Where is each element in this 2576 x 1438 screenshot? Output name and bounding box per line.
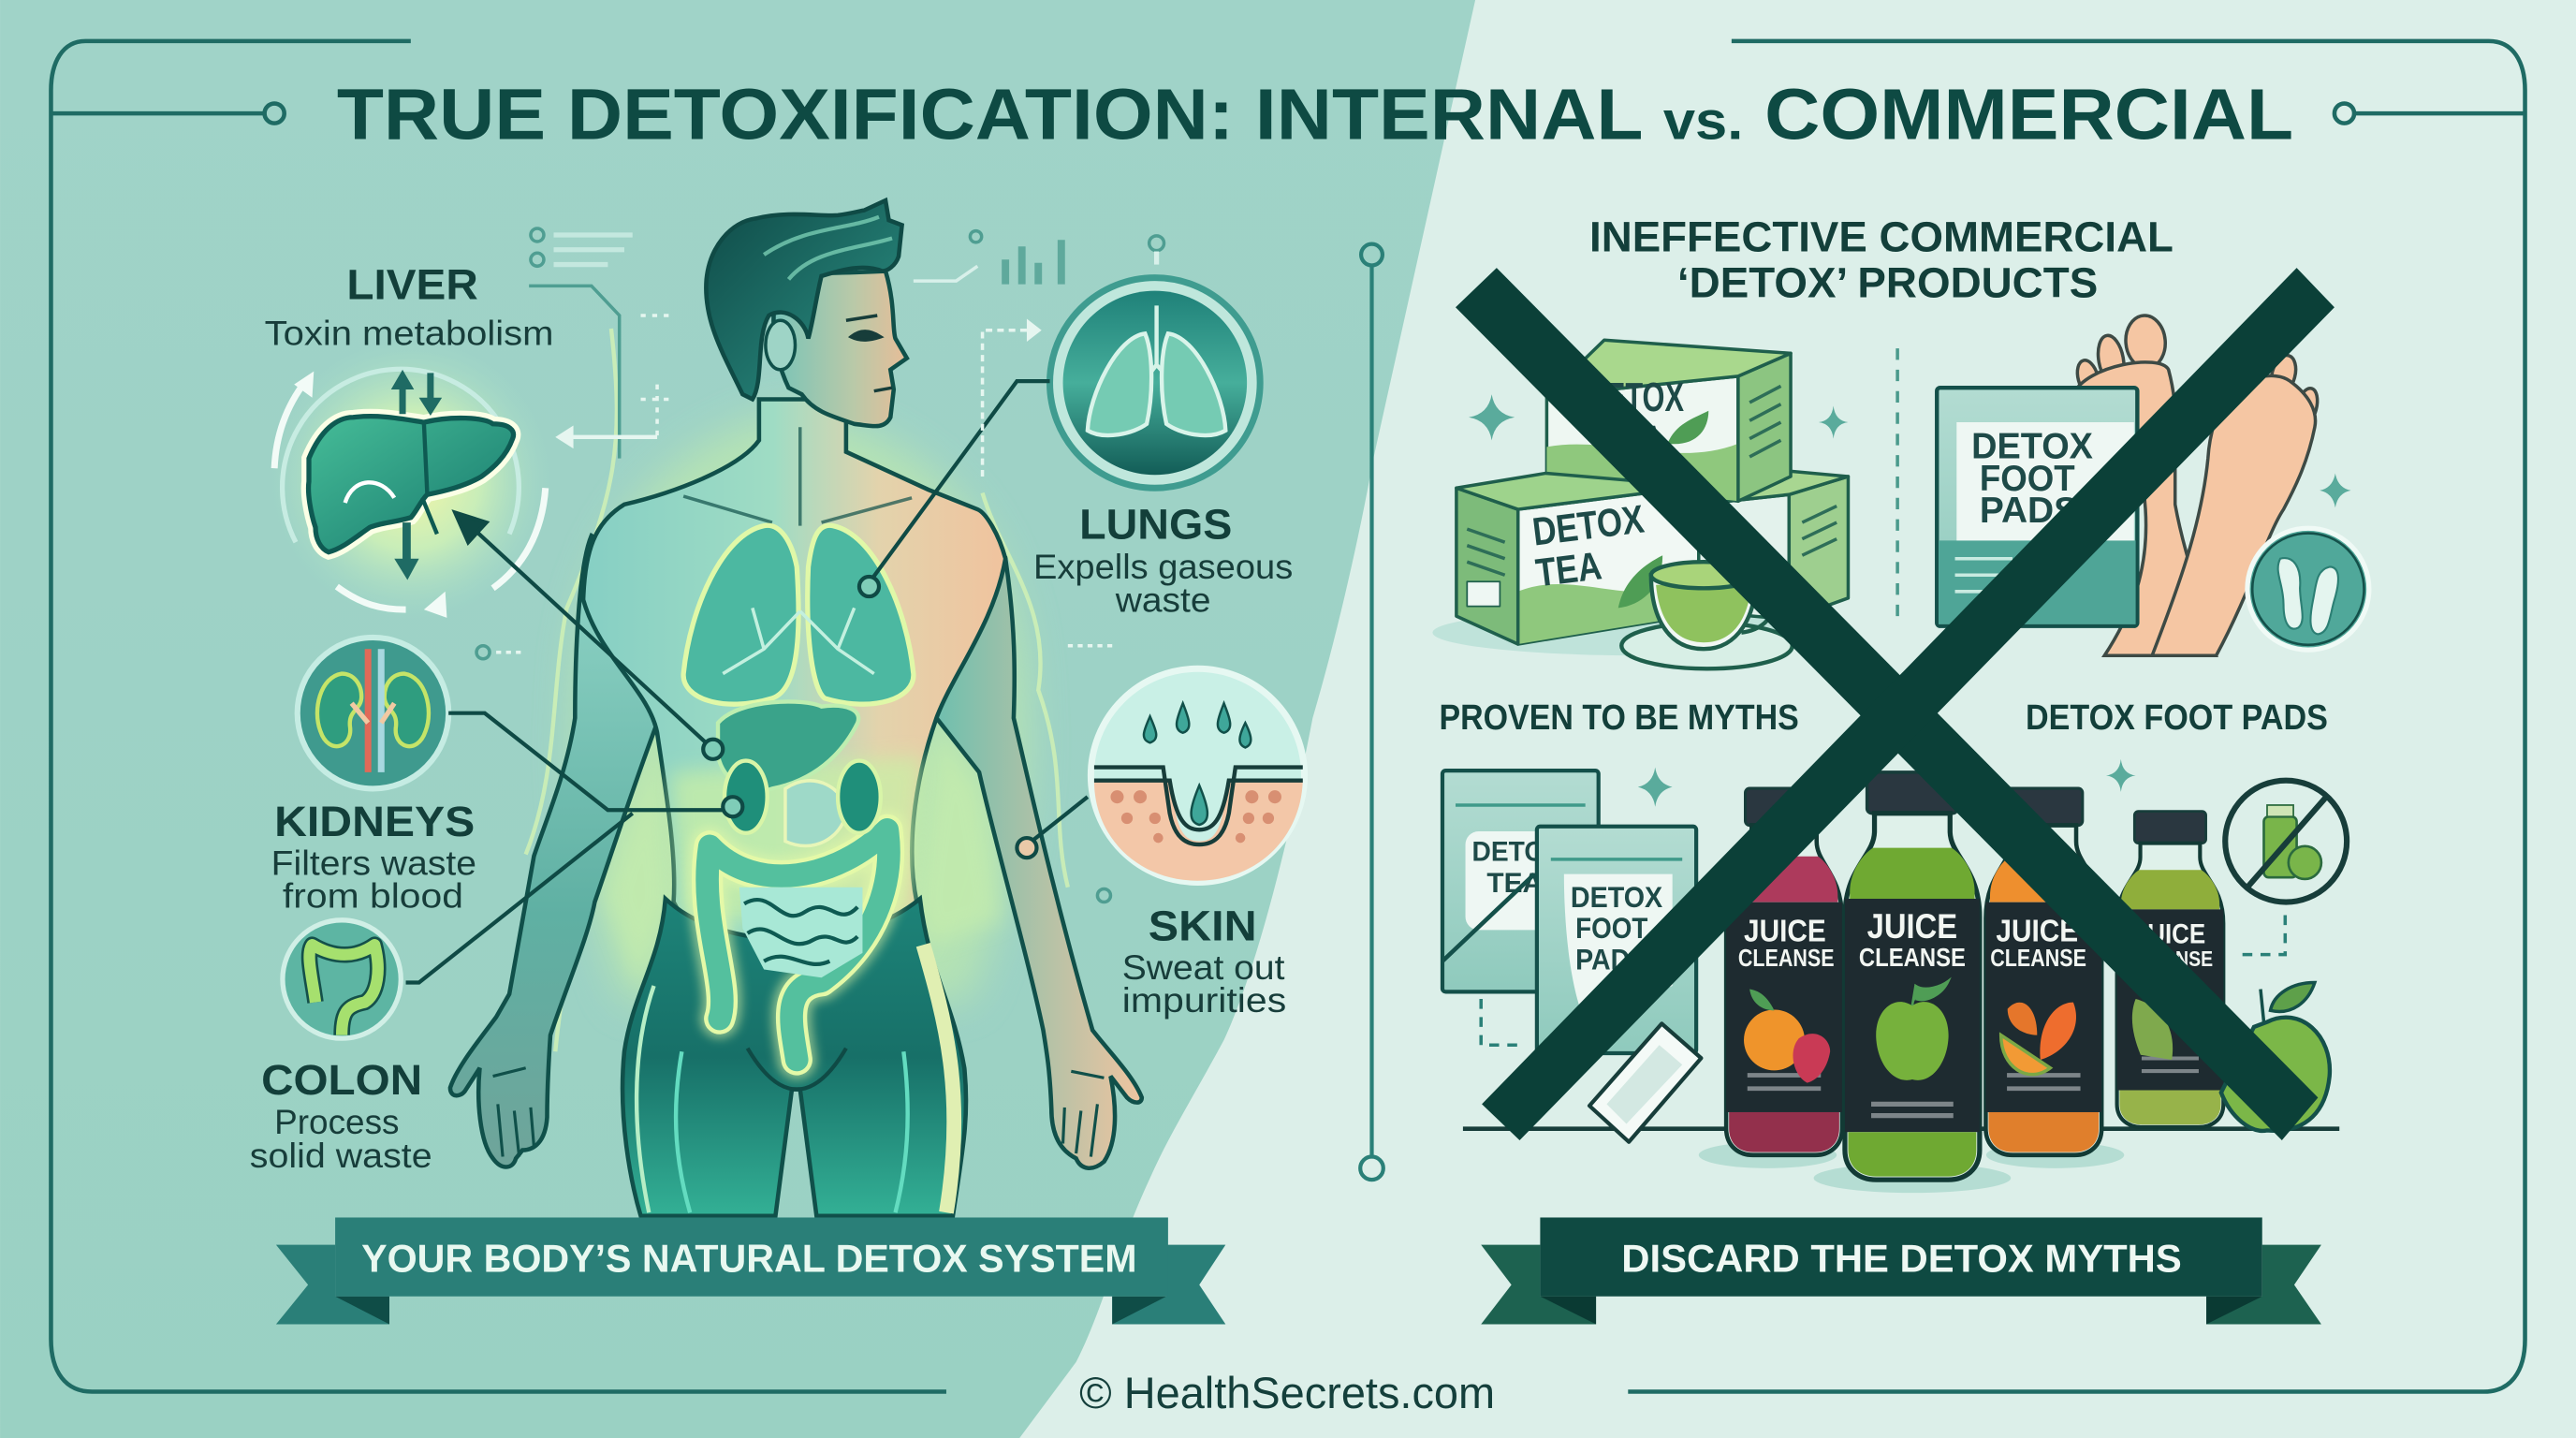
lower box: TEA (1533, 543, 1604, 594)
colon text: COLON (261, 1056, 422, 1104)
large intestine (708, 829, 888, 1060)
bare feet (2073, 314, 2321, 655)
face details (846, 315, 892, 391)
lungs text: waste (1115, 581, 1211, 620)
lungs connector (872, 381, 1050, 579)
lower box: DETOX (1530, 496, 1647, 554)
dashed connector: no juice (2241, 916, 2285, 955)
kidneys text: KIDNEYS (274, 798, 475, 845)
skin icon (1090, 668, 1305, 882)
right heading: INEFFECTIVE COMMERCIAL (1589, 213, 2174, 261)
thigh highlights (637, 945, 954, 1212)
no juice icon (2225, 781, 2347, 902)
liver shape (309, 417, 514, 552)
droplets (1144, 703, 1251, 825)
toes (2124, 314, 2168, 370)
juice bottle: green (1845, 772, 1980, 1180)
ear (766, 320, 795, 370)
left arm (450, 536, 657, 1167)
kidneys text: Filters waste (271, 844, 476, 883)
juice bottle: green: CLEANSE (1859, 943, 1966, 972)
pores (1110, 790, 1281, 843)
abdomen glow (670, 756, 923, 920)
liver text: Toxin metabolism (265, 315, 554, 353)
title: TRUE DETOXIFICATION: INTERNAL vs. COMMERCIAL (337, 74, 2293, 154)
colon icon (283, 920, 401, 1038)
connector lines (406, 381, 1088, 983)
juice bottle: olive: JUICE (2134, 918, 2205, 949)
foot pads pack: FOOT (1980, 459, 2075, 499)
banner: natural detox system (276, 1217, 1225, 1325)
footer credit: © HealthSecrets.com (1079, 1369, 1495, 1418)
product caption: myths: PROVEN TO BE MYTHS (1439, 697, 1799, 737)
juice bottle: berry: CLEANSE (1738, 946, 1835, 972)
foot pads pack: DETOX (1971, 427, 2093, 467)
small intestine (739, 888, 862, 977)
aura lines (526, 329, 1068, 1051)
collar bones (683, 427, 912, 526)
lungs in body (683, 525, 914, 704)
lungs text: LUNGS (1079, 501, 1232, 549)
juice bottle: orange: CLEANSE (1990, 946, 2086, 972)
legs (622, 899, 966, 1216)
apple (2221, 983, 2330, 1131)
liver text: LIVER (346, 260, 478, 308)
kidneys icon (298, 638, 448, 788)
juice bottle: green: JUICE (1867, 907, 1957, 946)
upper box: DETOX (1586, 374, 1684, 420)
back packet: TEA (1486, 868, 1543, 899)
left fingers (493, 1068, 534, 1157)
liver arrows (391, 370, 442, 580)
body glow (574, 411, 1028, 1003)
detox packets (1442, 770, 1701, 1142)
skin text: SKIN (1149, 902, 1257, 950)
juice bottle: olive: CLEANSE (2126, 946, 2213, 971)
gap between arms and torso (605, 731, 1003, 986)
skin text: impurities (1122, 981, 1286, 1020)
colon text (250, 1056, 432, 1175)
foot pads pack: PADS (1980, 491, 2078, 531)
kidneys text (271, 798, 476, 916)
colon text: solid waste (250, 1137, 432, 1175)
skin text (1122, 902, 1286, 1020)
front packet (1537, 827, 1696, 1053)
juice bottle: berry: JUICE (1744, 915, 1826, 949)
lungs text: Expells gaseous (1033, 548, 1293, 586)
colon text: Process (274, 1103, 400, 1141)
box shadow (1432, 609, 1853, 655)
hair streaks (764, 217, 892, 279)
juice bottle: orange: JUICE (1996, 915, 2078, 949)
liver halo (309, 417, 514, 552)
bottle shadows (1699, 1142, 2124, 1193)
lower box (1456, 473, 1699, 644)
lungs text (1033, 501, 1293, 620)
hair (706, 200, 902, 399)
back packet: DETOX (1472, 837, 1562, 868)
foot patch (1589, 1023, 1701, 1142)
stomach (785, 781, 846, 846)
liver icon (271, 340, 550, 620)
juice bottle: orange (1985, 788, 2101, 1155)
banner: discard the myths (1481, 1217, 2321, 1325)
divider line (1360, 244, 1383, 1180)
right heading: ‘DETOX’ PRODUCTS (1677, 259, 2098, 307)
torso (583, 399, 1005, 952)
juice bottle: berry (1726, 788, 1842, 1155)
upper box (1546, 340, 1791, 501)
banner: natural detox system: YOUR BODY’S NATURAL DETOX SYSTEM (361, 1236, 1137, 1280)
sparkles (1469, 394, 2351, 807)
back packet (1442, 770, 1599, 991)
detox tea boxes (1432, 340, 1853, 655)
lungs icon (1050, 278, 1260, 488)
decorative data marks (476, 228, 1164, 902)
skin connector (1032, 797, 1088, 842)
skin text: Sweat out (1122, 948, 1284, 987)
kidneys in body (724, 761, 881, 833)
front packet: PADS (1575, 942, 1647, 976)
front packet: DETOX (1571, 880, 1662, 914)
foot badge icon (2247, 528, 2369, 650)
back right box (1699, 468, 1848, 620)
front packet: FOOT (1575, 911, 1647, 945)
pelvis line (748, 1049, 846, 1090)
banner: discard the myths: DISCARD THE DETOX MYTHS (1621, 1236, 2182, 1280)
dashed connector (1481, 999, 1521, 1045)
upper box: TEA (1599, 417, 1664, 462)
human body figure (450, 200, 1142, 1216)
liver arrow (466, 522, 713, 749)
shelf (1463, 1127, 2339, 1130)
big X mark (1456, 268, 2334, 1140)
juice bottle: olive (2117, 812, 2223, 1127)
colon connector (406, 814, 633, 983)
right heading (1589, 213, 2174, 307)
foot pads pack (1937, 388, 2137, 626)
tea cup (1621, 562, 1793, 668)
dashed divider (1896, 348, 1898, 616)
liver in body (718, 701, 858, 791)
liver text (265, 260, 554, 353)
right fingers (1063, 1071, 1104, 1157)
kidneys text: from blood (283, 877, 463, 916)
head (773, 271, 907, 426)
orbit arrows (274, 381, 546, 609)
right arm (936, 559, 1142, 1168)
product caption: pads: DETOX FOOT PADS (2026, 697, 2328, 737)
kidneys connector (448, 713, 723, 810)
